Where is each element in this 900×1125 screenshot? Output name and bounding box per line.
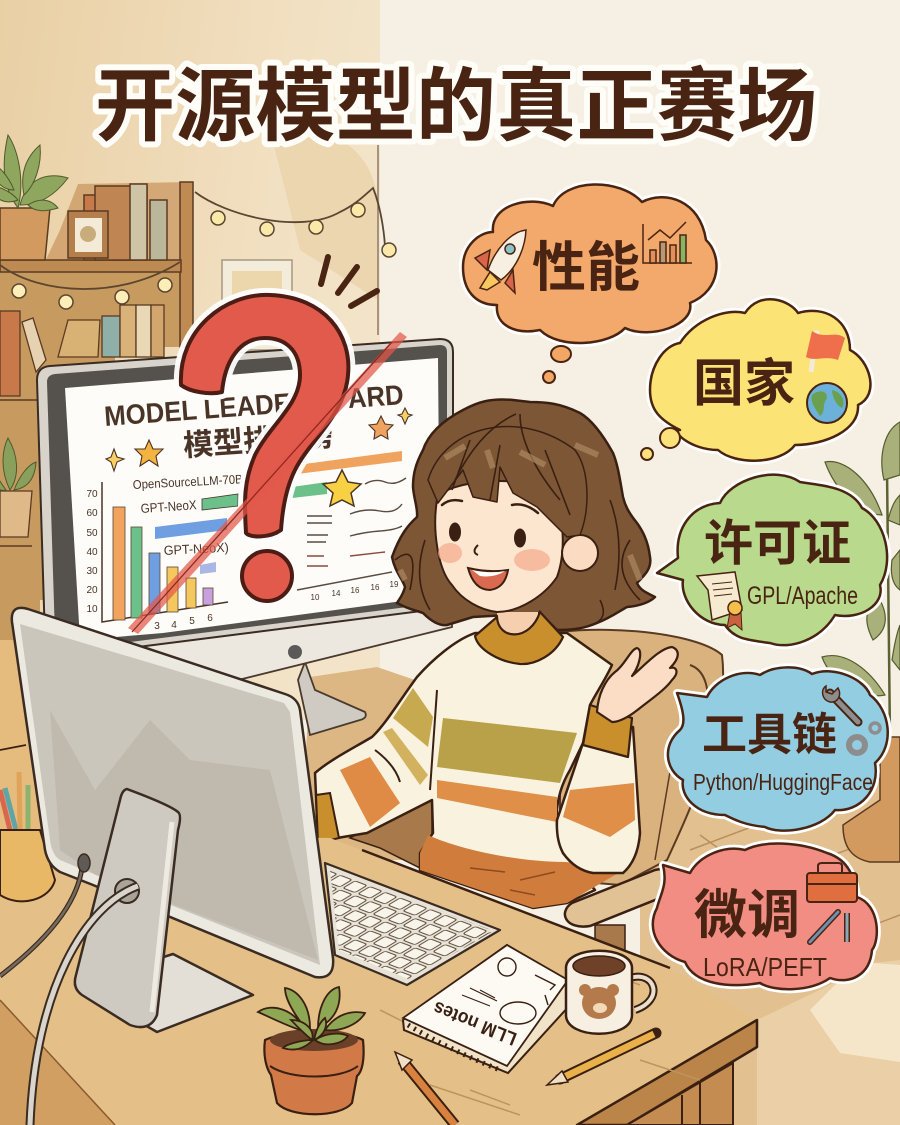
books upper shelf	[84, 184, 167, 260]
bubble label: 微调	[694, 886, 800, 945]
right line chart	[297, 478, 406, 602]
string lights on shelf	[0, 262, 180, 309]
desk	[0, 835, 757, 1125]
right line chart: 14	[332, 589, 341, 598]
desk front face	[577, 1020, 757, 1125]
bubble sublabel: LoRA/PEFT	[703, 952, 827, 982]
icon: flag	[806, 330, 845, 372]
notebook	[403, 945, 570, 1073]
pencil left	[395, 1052, 455, 1125]
y axis and vertical bars chart: 5	[189, 616, 195, 627]
bubble sublabel: GPL/Apache	[747, 582, 858, 610]
sweater orange stripe	[437, 780, 557, 822]
desk back surface	[300, 667, 432, 860]
screen subtitle: 模型排行榜	[182, 420, 334, 463]
monitor stand base	[75, 954, 253, 1032]
icon: toolbox	[807, 863, 857, 902]
red slash through leaderboard	[128, 332, 407, 634]
right sleeve	[557, 727, 640, 873]
plant right side	[822, 422, 900, 862]
hair highlights	[400, 445, 640, 580]
neck	[497, 612, 538, 638]
taped picture on wall	[222, 260, 292, 350]
string lights on wall	[195, 188, 396, 257]
bubble label: 许可证	[704, 517, 851, 571]
leaderboard labels: GPT-NeoX	[140, 497, 197, 516]
thought dots yellow	[641, 428, 680, 460]
y axis and vertical bars chart: 70	[86, 489, 98, 500]
succulent plant	[258, 987, 365, 1114]
torso and sweater	[315, 633, 640, 908]
picture frame	[68, 211, 108, 258]
y axis and vertical bars chart: 50	[86, 528, 98, 539]
bubble: 微调	[653, 844, 877, 989]
sweater olive stripe	[437, 718, 577, 783]
screen title: MODEL LEADERBOARD	[103, 379, 405, 432]
face	[435, 481, 563, 612]
thought dots orange	[543, 346, 571, 383]
bubble label: 工具链	[702, 709, 837, 760]
bubble label: 国家	[693, 355, 795, 412]
cuff right	[583, 705, 632, 757]
keyboard	[325, 863, 500, 985]
pencil right	[547, 1033, 656, 1085]
leaderboard labels: OpenSourceLLM-70B	[132, 472, 243, 492]
leaderboard labels	[132, 472, 243, 558]
bear face	[579, 984, 619, 1019]
wooden bookshelf	[0, 182, 193, 835]
hair	[392, 399, 655, 630]
right line chart: 10	[311, 593, 320, 602]
floor and rug	[640, 740, 900, 1125]
icon: gears	[849, 723, 880, 753]
monitor screen	[65, 358, 440, 640]
sweater hem	[420, 835, 627, 908]
bubble: 性能	[463, 184, 717, 343]
icon: globe	[807, 383, 847, 423]
leaderboard labels: GPT-NeoX)	[163, 540, 229, 558]
left sleeve stripes	[393, 688, 433, 747]
right line chart: 16	[351, 586, 360, 595]
y axis and vertical bars chart: 40	[86, 547, 98, 558]
cable long	[30, 886, 138, 1125]
y axis and vertical bars chart: 4	[171, 620, 177, 631]
bubble label: 性能	[532, 238, 640, 298]
books lower shelf	[0, 305, 164, 396]
hole ring	[115, 879, 139, 903]
chair	[350, 630, 723, 960]
eyes	[449, 522, 526, 548]
monitor bezel	[37, 339, 453, 648]
icon: rocket	[475, 230, 526, 293]
horizontal bars	[155, 451, 402, 574]
y axis and vertical bars chart: 6	[207, 613, 213, 624]
y axis and vertical bars chart	[86, 482, 228, 632]
plug	[78, 854, 90, 872]
hand	[597, 647, 678, 722]
icon: tools	[810, 912, 847, 942]
pencil cup	[0, 772, 55, 901]
ear	[562, 535, 598, 571]
y axis and vertical bars chart: 3	[154, 621, 160, 632]
bangs	[428, 427, 587, 537]
collar	[475, 612, 563, 664]
woman	[315, 399, 678, 908]
right line chart: 16	[371, 583, 380, 592]
icon: wrench	[823, 686, 858, 722]
emphasis marks	[321, 257, 377, 306]
icon: growth chart	[643, 222, 692, 263]
right line chart: 19	[390, 580, 399, 589]
y axis and vertical bars chart: 20	[86, 585, 98, 596]
desk legs	[627, 1063, 733, 1125]
icon: certificate	[697, 572, 742, 630]
cuff left	[316, 793, 339, 843]
bubble: 许可证	[657, 475, 887, 645]
title: 开源模型的真正赛场	[95, 62, 817, 151]
cheeks	[438, 543, 550, 571]
chair armrest	[565, 869, 683, 927]
eyebrows	[442, 500, 538, 513]
y axis and vertical bars chart: 60	[86, 508, 98, 519]
chair legs	[595, 925, 625, 960]
back monitor	[37, 339, 453, 735]
small plant on left shelf	[0, 438, 36, 537]
bubble: 工具链	[668, 667, 888, 831]
icon: stars	[106, 408, 412, 506]
y axis and vertical bars chart: 10	[86, 604, 98, 615]
front monitor back	[0, 608, 333, 1125]
chair seat	[350, 795, 432, 868]
mouth	[468, 568, 508, 590]
icon: question mark	[181, 295, 348, 601]
cable short	[0, 868, 82, 976]
icon: potted plant on shelf	[0, 135, 68, 260]
notebook: LLM notes	[430, 996, 520, 1049]
nose	[474, 545, 478, 555]
y axis and vertical bars chart: 30	[86, 566, 98, 577]
monitor stand neck	[75, 789, 180, 1027]
bubble: 国家	[650, 299, 870, 461]
coffee mug	[566, 951, 654, 1034]
monitor stand	[298, 662, 366, 735]
monitor chin	[100, 600, 452, 690]
